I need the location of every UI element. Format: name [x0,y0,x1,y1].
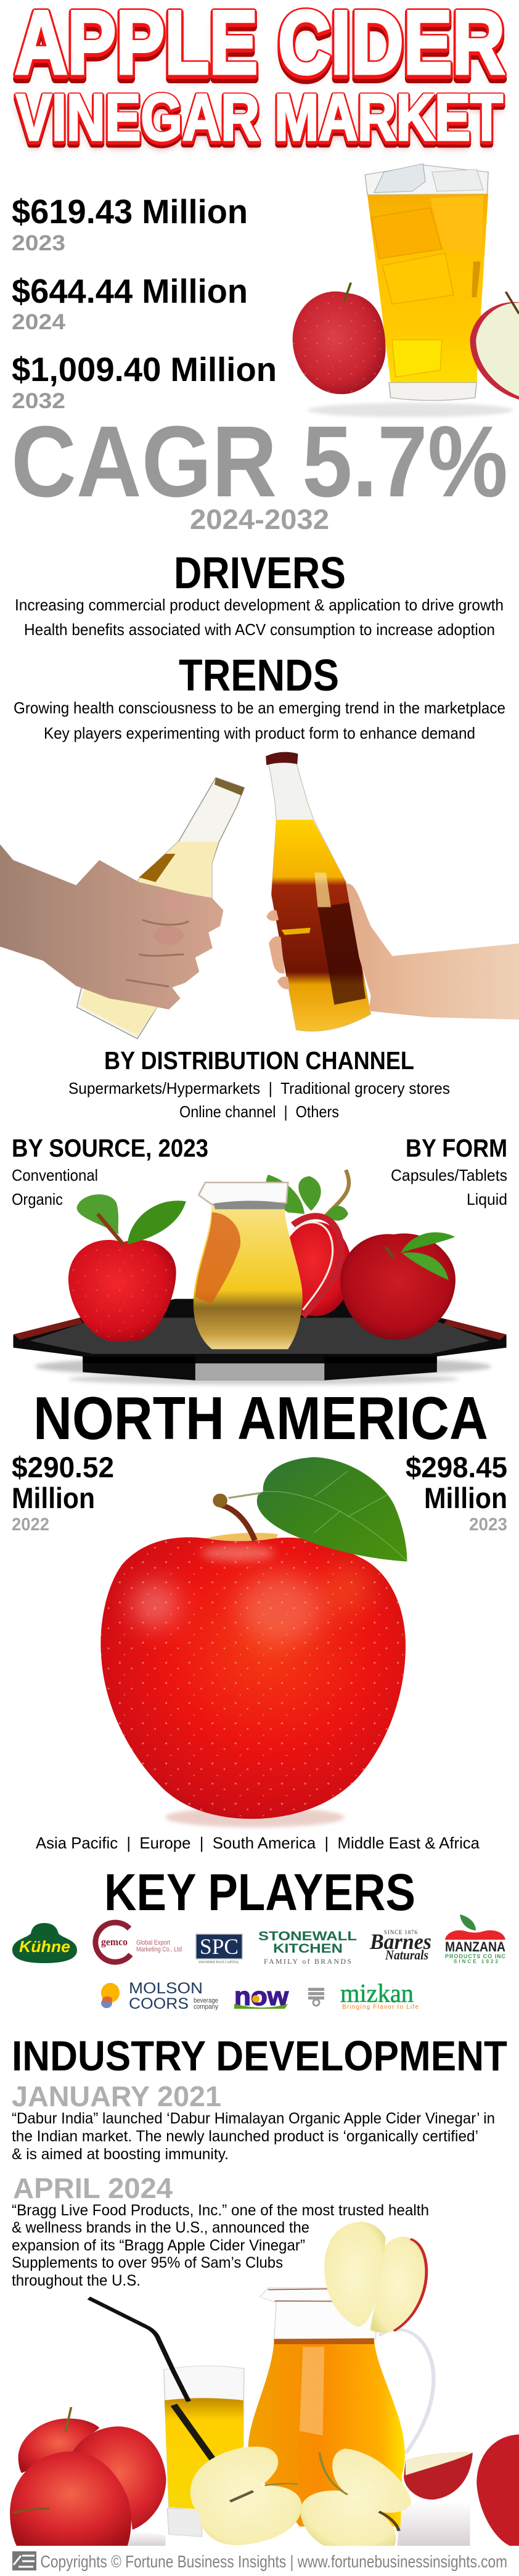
logo: SPC: SPC [200,1934,239,1959]
logo: Manzana: PRODUCTS CO INC [445,1953,505,1959]
logo: Mizkan: Bringing Flavor to Life [342,2004,419,2011]
market value 2032: $1,009.40 Million [12,350,277,388]
logo: Barnes Naturals: Barnes [369,1929,431,1954]
development April 2024: Supplements to over 95% of Sam’s Clubs [12,2254,283,2271]
by form: Capsules/Tablets [391,1166,507,1184]
logo: Kühne [12,1923,77,1963]
by source: Conventional [12,1166,98,1184]
logo: small grey mark [308,1988,324,2006]
north america value 2022 [12,1451,114,1535]
key players heading: KEY PLAYERS [104,1863,415,1921]
development April 2024: APRIL 2024 [13,2172,173,2204]
logo: Mizkan: mizkan [340,1980,414,2008]
CAGR figure: 2024-2032 [190,504,329,535]
logo: Molson Coors: MOLSON [129,1980,203,1997]
market value 2024: $644.44 Million [12,272,248,310]
by source: BY SOURCE, 2023 [12,1134,208,1162]
development January 2021: the Indian market. The newly launched product is ‘organically certified’ [12,2128,478,2145]
logo: Manzana [445,1914,505,1964]
by distribution channel [68,1046,450,1121]
development January 2021: JANUARY 2021 [12,2080,221,2112]
north america value 2023: $298.45 [406,1451,507,1483]
logo: Barnes Naturals: SINCE 1876 [384,1929,418,1935]
illustration: hands toasting bottles [0,752,519,1039]
development January 2021 [12,2080,495,2163]
logo: Molson Coors [101,1980,218,2012]
development January 2021: & is aimed at boosting immunity. [12,2146,229,2163]
north america value 2022: Million [12,1482,95,1514]
logo: Barnes Naturals: Naturals [385,1947,428,1963]
north america value 2023: Million [424,1482,507,1514]
by distribution channel: Supermarkets/Hypermarkets | Traditional grocery stores [68,1079,450,1097]
logo: Gemco: gemco [101,1936,128,1948]
north america value 2023: 2023 [469,1515,507,1535]
north america value 2022: $290.52 [12,1451,114,1483]
trends: Key players experimenting with product form to enhance demand [44,724,475,742]
by distribution channel: BY DISTRIBUTION CHANNEL [104,1046,414,1075]
development April 2024: “Bragg Live Food Products, Inc.” one of the most trusted health [12,2202,429,2219]
drivers: DRIVERS [174,549,346,598]
north america value 2022: 2022 [12,1515,49,1535]
market value 2024: 2024 [12,310,66,334]
market value 2024 [12,272,248,334]
by form: BY FORM [406,1134,507,1162]
development April 2024: & wellness brands in the U.S., announced the [12,2219,309,2236]
development April 2024: throughout the U.S. [12,2272,141,2289]
logo: Gemco [96,1922,182,1962]
logo: Stonewall Kitchen [258,1929,357,1966]
development April 2024 [12,2172,429,2289]
development April 2024: expansion of its “Bragg Apple Cider Vinegar” [12,2237,305,2254]
drivers: Health benefits associated with ACV consumption to increase adoption [24,620,495,639]
trends [14,651,505,742]
by distribution channel: Online channel | Others [179,1102,339,1121]
by source: Organic [12,1190,63,1208]
other regions list: Asia Pacific | Europe | South America | Middle East & Africa [36,1834,480,1852]
logo: Stonewall Kitchen: KITCHEN [273,1942,343,1956]
logo: Gemco: Global Export [136,1939,170,1946]
market value 2023: 2023 [12,231,65,255]
market value 2032 [12,350,277,413]
north america value 2023 [406,1451,507,1535]
by source [12,1134,208,1208]
logo: Molson Coors: COORS [129,1995,189,2012]
illustration: glass of cider with apples [293,164,519,417]
illustration: jug and apples on tray [13,1170,507,1385]
logo: Manzana: SINCE 1922 [454,1959,499,1964]
logo: NOW: now [234,1982,288,2011]
trends: TRENDS [179,651,339,700]
by form [391,1134,507,1208]
logo: Manzana: MANZANA [445,1939,505,1955]
market value 2032: 2032 [12,389,65,413]
logo: Kühne: Kühne [19,1937,70,1956]
drivers [15,549,504,639]
logo: Molson Coors: beverage [194,1997,218,2004]
illustration: large red apple [100,1457,407,1827]
logo: Molson Coors: company [194,2003,218,2011]
market value 2023: $619.43 Million [12,192,248,231]
market value 2023 [12,192,248,255]
illustration: cider pitcher, glass and apples [10,2222,519,2547]
logo: SPC [196,1934,242,1964]
title [15,0,505,162]
logo: Stonewall Kitchen: STONEWALL [258,1929,357,1943]
development January 2021: “Dabur India” launched ‘Dabur Himalayan Organic Apple Cider Vinegar’ in [12,2110,495,2127]
by form: Liquid [467,1190,507,1208]
logo: Gemco: Marketing Co., Ltd [136,1946,182,1953]
logo: SPC: SWANDER PACE CAPITAL [198,1961,239,1964]
logo: Stonewall Kitchen: FAMILY of BRANDS [264,1957,351,1966]
